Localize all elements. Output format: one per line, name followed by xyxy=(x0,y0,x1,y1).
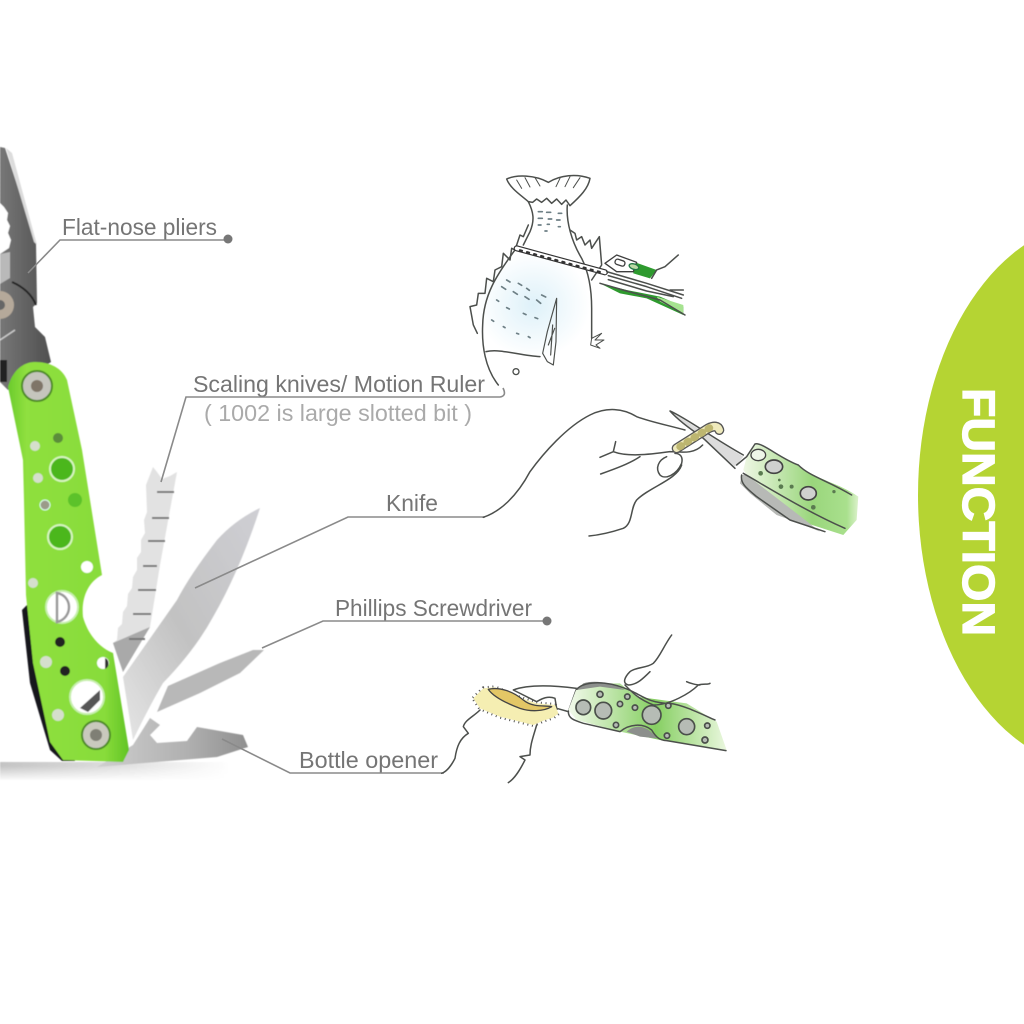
ruler blade xyxy=(517,248,605,273)
illustration: knife whittling stick xyxy=(483,410,858,536)
green handle xyxy=(8,362,129,762)
knife blade xyxy=(123,508,260,740)
tool handle in hand xyxy=(600,255,685,315)
opener head xyxy=(513,686,577,712)
callout: Flat-nose pliers xyxy=(28,214,232,273)
banner: green semicircle with FUNCTION xyxy=(918,221,1024,769)
knife blade xyxy=(670,411,743,467)
illustration: opening a bottle cap xyxy=(442,635,727,783)
illustration: scaling a fish xyxy=(470,175,685,385)
callout: Knife xyxy=(195,490,485,588)
bottle cap xyxy=(473,687,558,725)
handle xyxy=(568,683,727,750)
callout: Knife: Knife xyxy=(386,490,438,516)
callout: Flat-nose pliers: Flat-nose pliers xyxy=(62,214,217,240)
callout: Bottle opener xyxy=(222,739,444,773)
callout: Scaling knives / Motion Ruler xyxy=(161,371,504,482)
handle xyxy=(743,443,858,535)
callout: Scaling knives / Motion Ruler: Scaling knives/ Motion Ruler xyxy=(193,371,485,397)
ground shadow xyxy=(0,762,230,781)
callout: Bottle opener: Bottle opener xyxy=(299,747,438,773)
stick xyxy=(677,427,719,448)
hand outline xyxy=(483,410,685,517)
callout: Phillips Screwdriver xyxy=(262,595,552,648)
bottle opener xyxy=(97,718,248,767)
callout: Phillips Screwdriver: Phillips Screwdriver xyxy=(335,595,532,621)
pliers jaw xyxy=(0,147,51,390)
banner title: FUNCTION xyxy=(953,388,1004,636)
phillips screwdriver xyxy=(157,650,264,712)
callout: Scaling knives / Motion Ruler: ( 1002 is large slotted bit ) xyxy=(204,400,472,426)
handle holes and screws xyxy=(22,371,110,749)
hand outline xyxy=(625,635,710,705)
scaling knife and ruler xyxy=(113,467,177,672)
multi-tool photo xyxy=(0,147,264,781)
black back plate xyxy=(22,600,75,761)
